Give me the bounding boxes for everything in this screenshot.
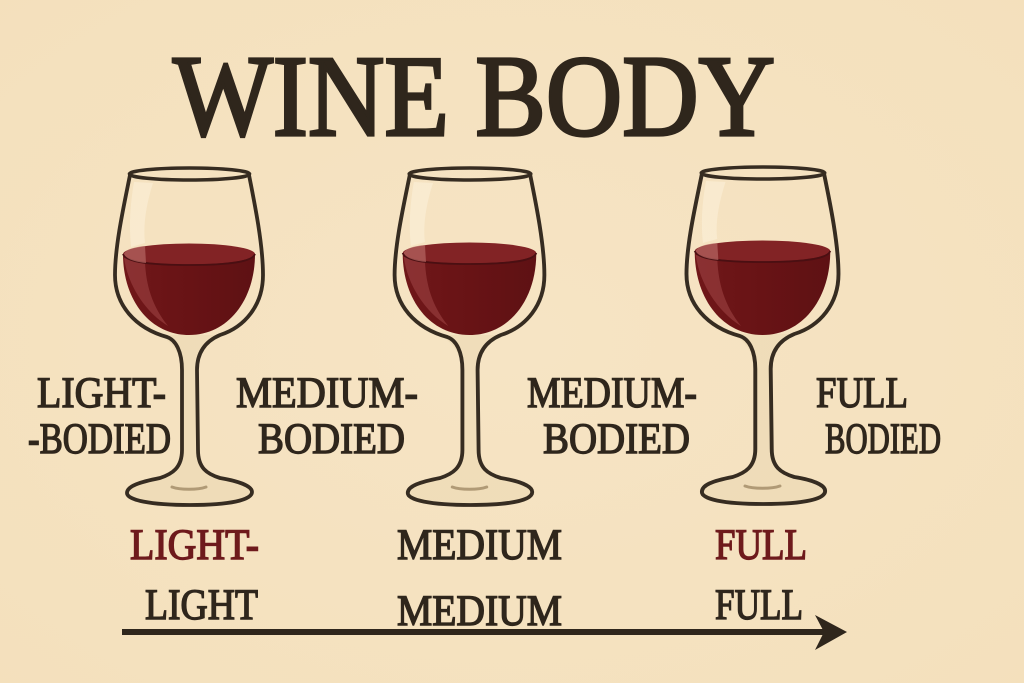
label: full bodied: FULL [816, 370, 908, 417]
scale label: full: FULL [715, 522, 807, 569]
glass: light-bodied [115, 168, 263, 505]
label: medium-bodied right: MEDIUM- [527, 370, 697, 417]
glass: full-bodied [686, 167, 838, 504]
scale label: light: LIGHT- [130, 522, 259, 569]
scale label: medium: MEDIUM [397, 522, 562, 569]
arrow: light to full [122, 615, 847, 650]
glass: medium-bodied [395, 168, 544, 505]
label: medium-bodied right: BODIED [543, 416, 690, 463]
scale label: full [715, 522, 807, 629]
scale label: medium: MEDIUM [397, 588, 562, 635]
label: medium-bodied left: BODIED [258, 416, 405, 463]
label: full bodied [816, 370, 941, 463]
label: light-bodied: -BODIED [28, 416, 171, 463]
label: medium-bodied left: MEDIUM- [236, 370, 418, 417]
scale label: full: FULL [715, 582, 803, 629]
label: full bodied: BODIED [825, 416, 941, 463]
label: medium-bodied left [236, 370, 418, 463]
label: light-bodied: LIGHT- [37, 370, 166, 417]
scale label: light [130, 522, 259, 629]
title: WINE BODY [173, 33, 775, 161]
label: light-bodied [28, 370, 171, 463]
label: medium-bodied right [527, 370, 697, 463]
scale label: medium [397, 522, 562, 635]
scale label: light: LIGHT [145, 582, 258, 629]
